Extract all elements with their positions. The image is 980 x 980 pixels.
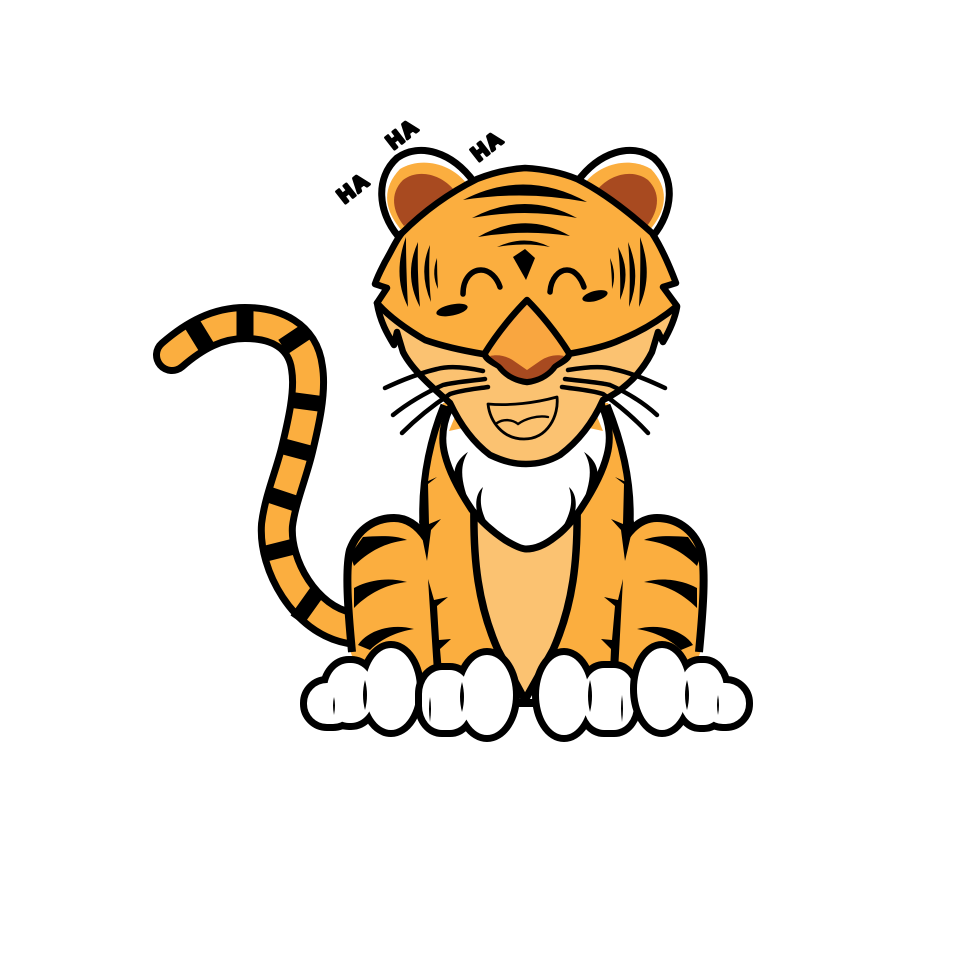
- paw: inner left: [422, 655, 513, 735]
- paw: inner right: [539, 655, 634, 735]
- side stripes left: [399, 237, 438, 307]
- right haunch: [613, 518, 704, 680]
- lower face: [377, 303, 677, 464]
- laughter text: HA left: HA: [333, 169, 375, 208]
- chest: [474, 505, 577, 700]
- nose: [485, 300, 569, 382]
- left ear: [382, 150, 474, 236]
- whiskers: [385, 367, 665, 433]
- forehead stripes: [463, 184, 587, 280]
- side stripes right: [610, 237, 647, 307]
- paw: far left: [307, 648, 417, 730]
- cheek marks: [435, 288, 609, 319]
- laughing eyes: [463, 270, 584, 294]
- laughter text: HA right: HA: [467, 127, 509, 166]
- paw: far right: [637, 648, 746, 730]
- laughing mouth: [488, 397, 557, 439]
- white neck ruff: [443, 406, 609, 549]
- left haunch: [347, 518, 438, 680]
- body: [419, 403, 634, 680]
- paw connector: [515, 699, 537, 707]
- laughter text: HA top: HA: [382, 115, 424, 154]
- upper face: [375, 168, 677, 354]
- toe divider marks: [333, 680, 719, 722]
- tiger tail: [172, 308, 350, 628]
- right ear: [577, 150, 669, 236]
